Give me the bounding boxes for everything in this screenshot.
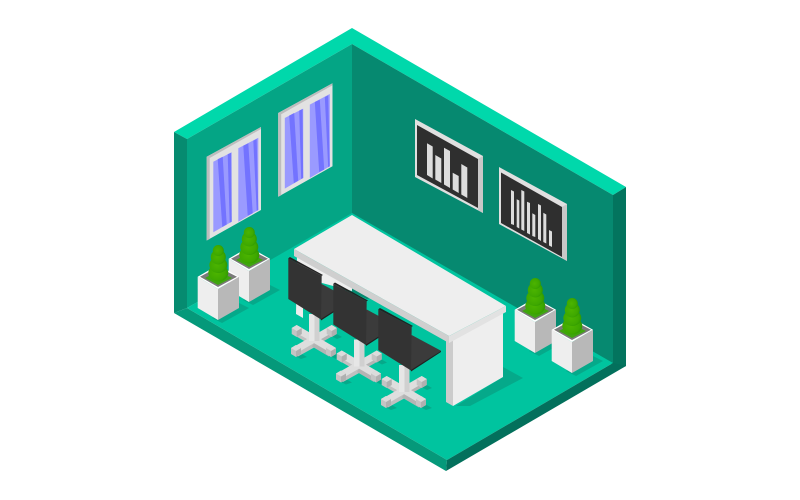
wall chart: right	[499, 167, 567, 261]
room: floor	[187, 213, 613, 460]
chair: left	[288, 257, 351, 359]
plant: back left	[229, 227, 280, 305]
room: right wall	[352, 44, 613, 365]
window: left	[207, 127, 261, 240]
plant: back right	[515, 278, 566, 356]
chair: middle	[333, 282, 396, 384]
room: right wall end	[613, 187, 626, 372]
room: left wall	[187, 44, 352, 308]
room: floor front-right edge	[446, 363, 626, 471]
window: right	[278, 83, 332, 197]
room: floor front-left edge	[174, 308, 447, 471]
table	[294, 215, 523, 406]
room: left wall end	[174, 132, 187, 313]
chair: right	[378, 308, 441, 410]
plant: front right	[552, 298, 603, 376]
plant: front left	[198, 245, 249, 323]
room: top rim of walls	[174, 28, 626, 195]
wall chart: left	[415, 119, 483, 213]
